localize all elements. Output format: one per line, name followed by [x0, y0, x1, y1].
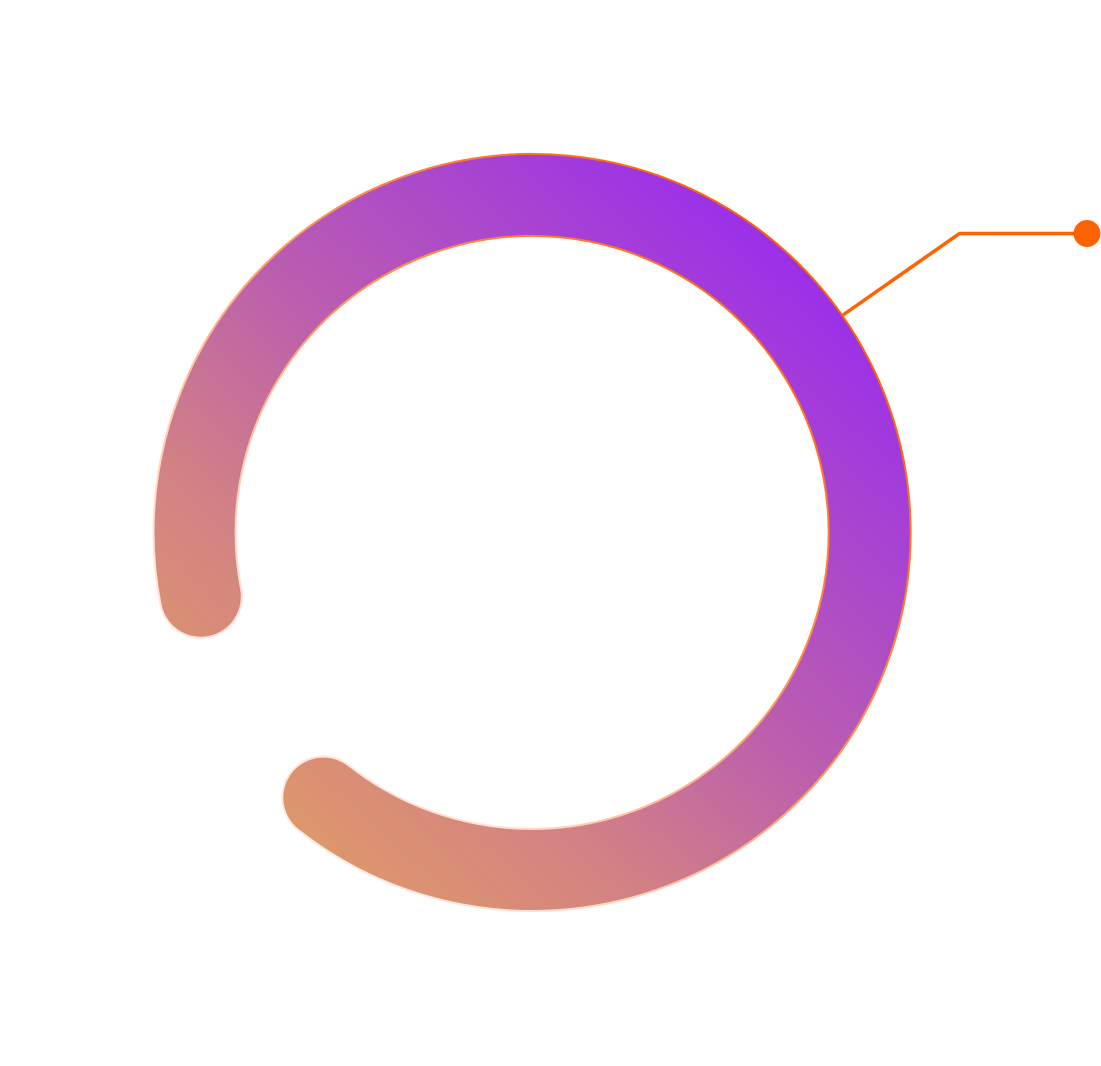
ring: gradient arc [195, 195, 870, 870]
callout leader line [843, 234, 1080, 315]
ring: outline [195, 195, 870, 870]
callout dot [1074, 220, 1100, 247]
